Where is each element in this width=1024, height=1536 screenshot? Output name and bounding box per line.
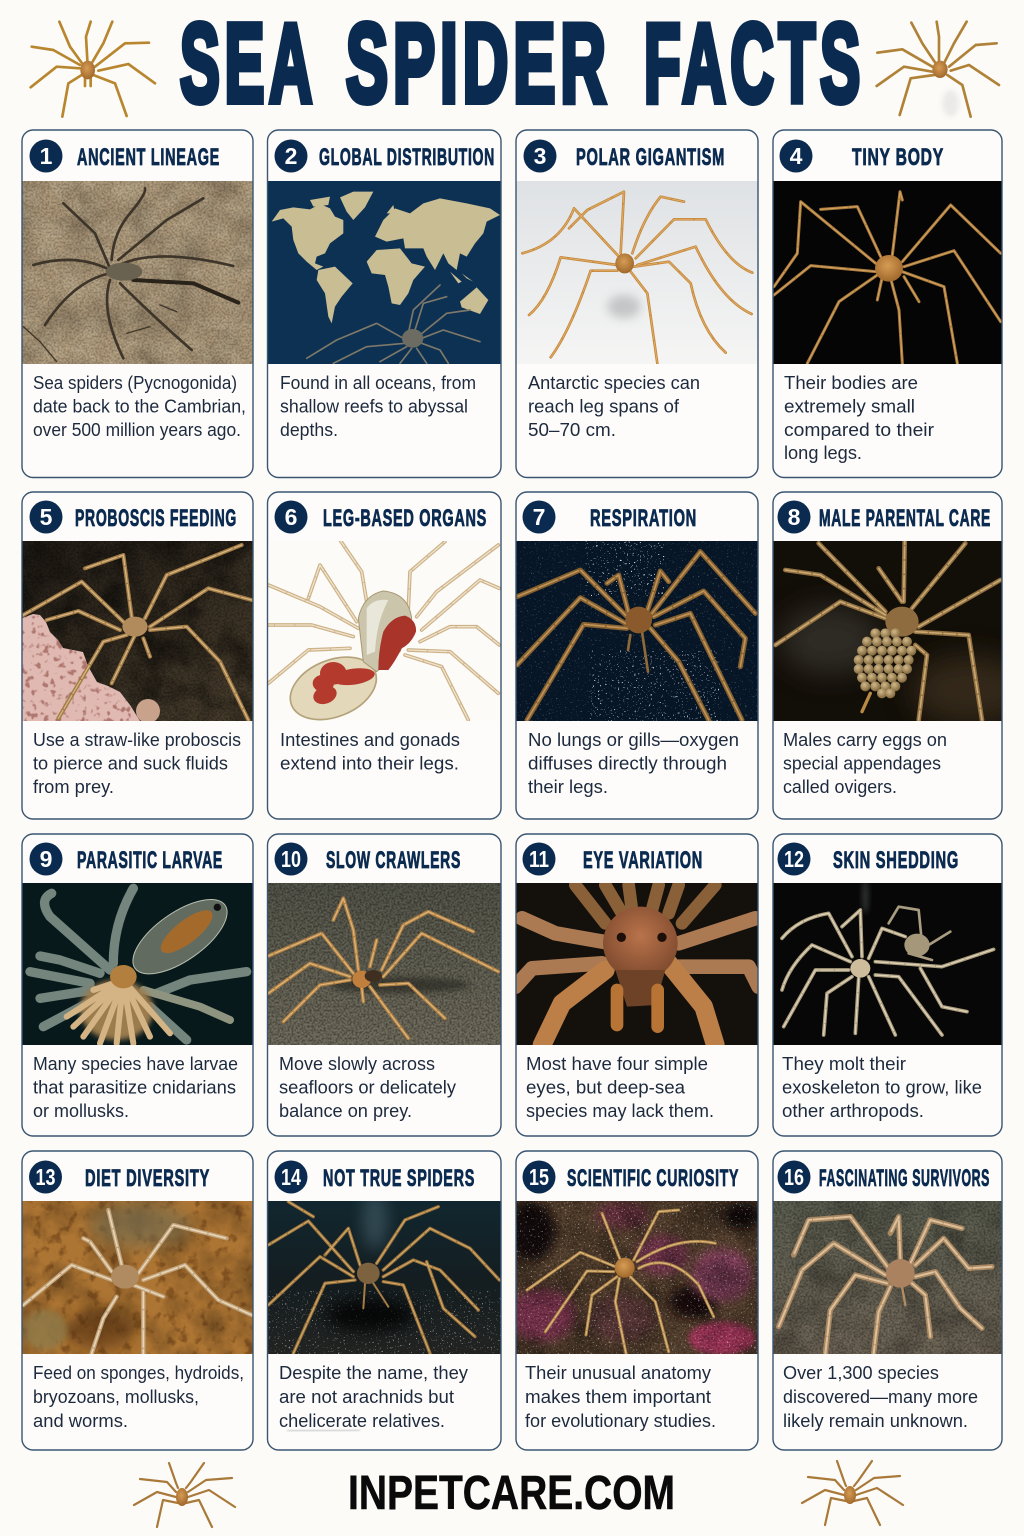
panel 3: polar gigantism	[516, 130, 758, 478]
egg mass	[854, 628, 916, 698]
description 9: that parasitize cnidarians	[33, 1076, 236, 1098]
larval capsule	[132, 899, 228, 974]
description 12	[782, 1053, 982, 1121]
panel 12: skin shedding	[773, 834, 1002, 1136]
panel frame	[268, 1151, 501, 1450]
description 2: Found in all oceans, from	[280, 372, 476, 393]
badge 9	[30, 842, 62, 876]
image: spider on sponge	[22, 1201, 253, 1354]
badge 14: 14	[281, 1164, 301, 1190]
description 3	[528, 372, 700, 440]
image: spider on seafloor	[267, 883, 501, 1045]
image: molting spider	[773, 880, 1002, 1045]
panel 8: male parental care	[773, 492, 1024, 819]
heading 10: SLOW CRAWLERS	[326, 847, 461, 874]
panel frame	[22, 492, 253, 819]
coral patches	[509, 1202, 762, 1355]
heading 14: NOT TRUE SPIDERS	[323, 1165, 475, 1192]
heading 4: TINY BODY	[852, 144, 944, 171]
description 1	[33, 372, 246, 440]
panel frame	[516, 130, 758, 478]
description 7: No lungs or gills—oxygen	[528, 729, 739, 750]
image: male carrying eggs	[774, 541, 1002, 721]
image: fossil sea spider on stone	[22, 181, 253, 364]
description 6	[280, 729, 460, 774]
panel 16: fascinating survivors	[773, 1151, 1002, 1450]
panel frame	[22, 834, 253, 1136]
red organs	[378, 616, 416, 670]
description 8	[783, 729, 947, 797]
icon: spider bottom left	[134, 1463, 235, 1527]
image: spider on dark sand	[267, 1190, 501, 1354]
badge 12: 12	[784, 846, 804, 872]
image: larva on polyp	[22, 883, 253, 1045]
map continents	[272, 192, 500, 323]
description 2	[280, 372, 476, 440]
badge 10: 10	[281, 846, 301, 872]
badge 9: 9	[40, 846, 52, 872]
body	[289, 656, 378, 720]
description 12: They molt their	[782, 1053, 906, 1074]
badge 11: 11	[529, 846, 549, 872]
description 14: are not arachnids but	[279, 1386, 454, 1407]
description 1: Sea spiders (Pycnogonida)	[33, 372, 237, 393]
description 14: chelicerate relatives.	[279, 1410, 445, 1431]
description 7	[528, 729, 739, 797]
badge 7	[522, 500, 556, 534]
heading 6: LEG-BASED ORGANS	[323, 505, 487, 532]
image: spider on coral rock	[509, 1201, 762, 1355]
panel frame	[773, 130, 1002, 478]
badge 8: 8	[788, 504, 801, 530]
badge 5	[30, 500, 62, 534]
heading 2: GLOBAL DISTRIBUTION	[319, 144, 495, 171]
description 3: 50–70 cm.	[528, 419, 616, 440]
description 4	[784, 372, 934, 463]
description 13: bryozoans, mollusks,	[33, 1386, 199, 1407]
image: anatomical illustration	[267, 540, 501, 731]
description 14	[279, 1362, 469, 1431]
panel 10: slow crawlers	[267, 834, 501, 1136]
description 4: Their bodies are	[784, 372, 918, 393]
panel frame	[516, 834, 758, 1136]
badge 6: 6	[285, 504, 297, 530]
description 4: long legs.	[784, 442, 862, 463]
description 12: other arthropods.	[782, 1100, 924, 1121]
spider on map	[307, 285, 480, 363]
heading 7: RESPIRATION	[590, 505, 697, 532]
description 11: species may lack them.	[526, 1100, 714, 1121]
badge 15	[522, 1160, 556, 1194]
description 5: from prey.	[33, 776, 114, 797]
description 1: over 500 million years ago.	[33, 419, 241, 440]
description 9	[33, 1053, 238, 1121]
description 16	[783, 1362, 978, 1431]
heading 5: PROBOSCIS FEEDING	[75, 505, 237, 532]
badge 15: 15	[529, 1164, 549, 1190]
badge 1	[30, 140, 62, 172]
panel 1: ancient lineage	[22, 130, 253, 478]
description 2: depths.	[280, 419, 338, 440]
badge 6	[274, 500, 308, 534]
description 14: Despite the name, they	[279, 1362, 469, 1383]
description 4: compared to their	[784, 419, 934, 440]
footer brand: INPETCARE.COM	[348, 1467, 675, 1520]
panel 7: respiration	[516, 492, 758, 819]
description 8: Males carry eggs on	[783, 729, 947, 750]
description 11: eyes, but deep-sea	[526, 1076, 686, 1098]
description 11	[526, 1053, 714, 1121]
description 15	[525, 1362, 716, 1431]
panel frame	[773, 1151, 1002, 1450]
image: spider on pink sponge	[22, 541, 253, 723]
title	[180, 2, 865, 126]
description 6: Intestines and gonads	[280, 729, 460, 750]
panel frame	[268, 492, 501, 819]
description 12: exoskeleton to grow, like	[782, 1076, 982, 1098]
badge 3	[524, 140, 556, 172]
description 5	[33, 729, 241, 797]
description 9: Many species have larvae	[33, 1053, 238, 1074]
icon: spider bottom right	[802, 1461, 903, 1525]
heading 3: POLAR GIGANTISM	[576, 144, 725, 171]
panel frame	[516, 492, 758, 819]
icon: spider top right	[877, 22, 999, 117]
image: antarctic spider on ice	[516, 181, 758, 364]
description 13: Feed on sponges, hydroids,	[33, 1362, 244, 1383]
badge 7: 7	[533, 504, 545, 530]
panel frame	[268, 130, 501, 478]
description 8: special appendages	[783, 752, 941, 774]
description 3: reach leg spans of	[528, 396, 680, 416]
pink sponge	[22, 614, 140, 721]
description 16: discovered—many more	[783, 1386, 978, 1407]
description 13	[33, 1362, 244, 1431]
description 7: diffuses directly through	[528, 752, 727, 774]
icon: spider top left	[31, 22, 155, 117]
description 13: and worms.	[33, 1410, 128, 1431]
badge 13: 13	[36, 1164, 56, 1190]
heading 15: SCIENTIFIC CURIOSITY	[567, 1165, 739, 1192]
badge 16: 16	[784, 1164, 804, 1190]
description 3: Antarctic species can	[528, 372, 700, 393]
panel 2: global distribution	[267, 130, 501, 478]
title: SEA	[180, 2, 317, 126]
image: spider in dark water	[516, 541, 758, 721]
panel 13: diet diversity	[22, 1151, 253, 1450]
description 2: shallow reefs to abyssal	[280, 396, 468, 416]
badge 2: 2	[285, 143, 297, 169]
panel 15: scientific curiosity	[509, 1151, 762, 1450]
heading 1: ANCIENT LINEAGE	[77, 144, 220, 171]
description 7: their legs.	[528, 776, 608, 797]
description 15: for evolutionary studies.	[525, 1410, 716, 1431]
heading 13: DIET DIVERSITY	[85, 1165, 210, 1192]
panel frame	[22, 130, 253, 478]
badge 12	[778, 842, 810, 876]
panel frame	[773, 492, 1002, 819]
panel 5: proboscis feeding	[22, 492, 253, 819]
badge 5: 5	[40, 504, 53, 530]
description 5: Use a straw-like proboscis	[33, 729, 241, 750]
description 4: extremely small	[784, 396, 915, 416]
badge 13	[29, 1160, 62, 1194]
panel frame	[773, 834, 1002, 1136]
badge 11	[522, 842, 556, 876]
description 15: Their unusual anatomy	[525, 1362, 712, 1383]
panel frame	[516, 1151, 758, 1450]
description 16: Over 1,300 species	[783, 1362, 939, 1383]
badge 1: 1	[40, 143, 53, 169]
panel 11: eye variation	[515, 834, 759, 1136]
badge 8	[778, 500, 810, 534]
badge 3: 3	[534, 143, 546, 169]
panel 6: leg-based organs	[267, 492, 501, 819]
badge 14	[274, 1160, 308, 1194]
description 10: Move slowly across	[279, 1053, 435, 1074]
badge 16	[778, 1160, 810, 1194]
description 15: makes them important	[525, 1386, 711, 1407]
description 9: or mollusks.	[33, 1100, 129, 1121]
badge 2	[274, 140, 308, 172]
badge 4: 4	[790, 143, 803, 169]
description 8: called ovigers.	[783, 776, 897, 797]
image: close-up of head	[515, 883, 759, 1045]
description 6: extend into their legs.	[280, 752, 459, 774]
description 10	[279, 1053, 457, 1121]
image: spider on black	[773, 181, 1002, 364]
panel 4: tiny body	[773, 130, 1002, 478]
badge 10	[274, 842, 308, 876]
panel frame	[22, 1151, 253, 1450]
heading 11: EYE VARIATION	[583, 847, 703, 874]
title: SPIDER	[346, 2, 611, 126]
image: world map with spider	[267, 181, 501, 364]
badge 4	[780, 140, 812, 172]
description 16: likely remain unknown.	[783, 1410, 968, 1431]
panel 9: parasitic larvae	[22, 834, 253, 1136]
heading 9: PARASITIC LARVAE	[77, 847, 223, 874]
description 10: balance on prey.	[279, 1100, 412, 1121]
panel frame	[268, 834, 501, 1136]
panel 14: not true spiders	[267, 1151, 501, 1450]
description 11: Most have four simple	[526, 1053, 708, 1074]
description 10: seafloors or delicately	[279, 1076, 457, 1098]
description 1: date back to the Cambrian,	[33, 396, 246, 416]
image: spider on sediment	[773, 1201, 1002, 1354]
description 5: to pierce and suck fluids	[33, 752, 228, 774]
